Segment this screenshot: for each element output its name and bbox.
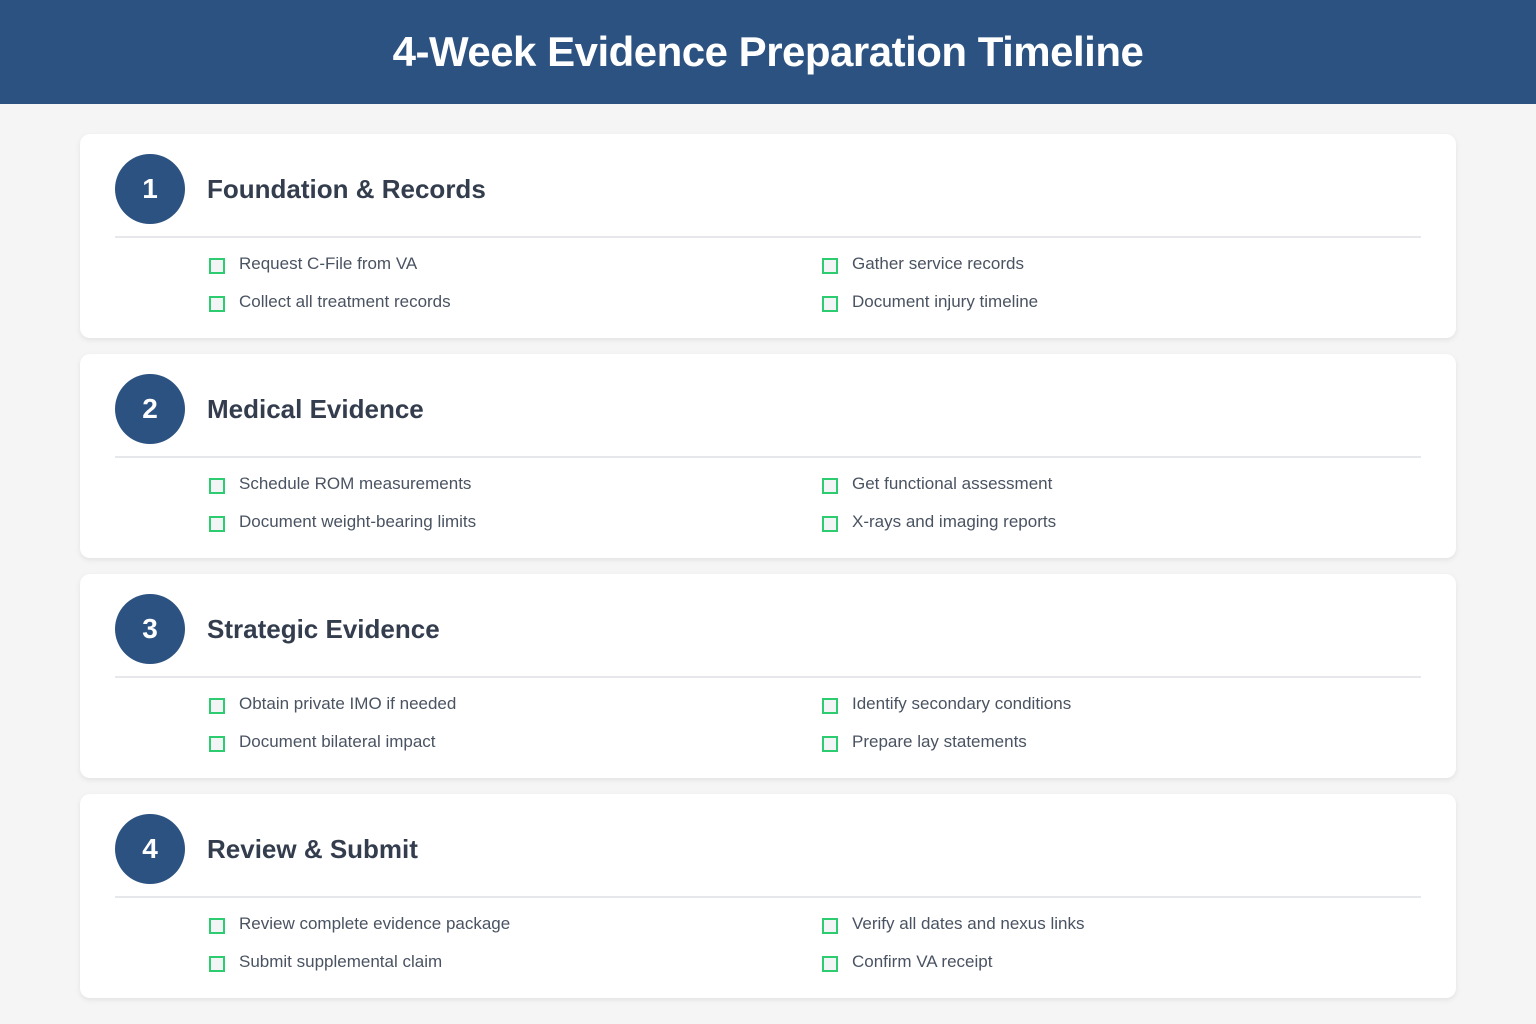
task: Collect all treatment records xyxy=(239,292,451,311)
task: Document bilateral impact xyxy=(239,732,436,751)
task: X-rays and imaging reports xyxy=(852,512,1056,531)
task: Prepare lay statements xyxy=(852,732,1027,751)
heading: Strategic Evidence: Strategic Evidence xyxy=(207,614,440,644)
step number 2 xyxy=(115,374,185,444)
panel: week 2 xyxy=(80,354,1456,558)
heading: Medical Evidence: Medical Evidence xyxy=(207,394,424,424)
task: Get functional assessment xyxy=(852,474,1052,493)
step number 4 xyxy=(115,814,185,884)
step number 4: 4 xyxy=(142,833,158,864)
heading: Foundation & Records: Foundation & Records xyxy=(207,174,486,204)
title xyxy=(0,0,1536,104)
panel: week 1 xyxy=(80,134,1456,338)
task: Document injury timeline xyxy=(852,292,1038,311)
step number 1: 1 xyxy=(142,173,158,204)
step number 3: 3 xyxy=(142,613,158,644)
panel: week 3 xyxy=(80,574,1456,778)
panel: week 4 xyxy=(80,794,1456,998)
step number 1 xyxy=(115,154,185,224)
task: Confirm VA receipt xyxy=(852,952,992,971)
task: Schedule ROM measurements xyxy=(239,474,471,493)
task: Obtain private IMO if needed xyxy=(239,694,456,713)
task: Document weight-bearing limits xyxy=(239,512,476,531)
task: Submit supplemental claim xyxy=(239,952,442,971)
step number 2: 2 xyxy=(142,393,158,424)
task: Verify all dates and nexus links xyxy=(852,914,1084,933)
task: Gather service records xyxy=(852,254,1024,273)
task: Request C-File from VA xyxy=(239,254,417,273)
task: Review complete evidence package xyxy=(239,914,510,933)
heading: Review & Submit: Review & Submit xyxy=(207,834,418,864)
step number 3 xyxy=(115,594,185,664)
title: 4-Week Evidence Preparation Timeline xyxy=(393,28,1143,75)
task: Identify secondary conditions xyxy=(852,694,1071,713)
